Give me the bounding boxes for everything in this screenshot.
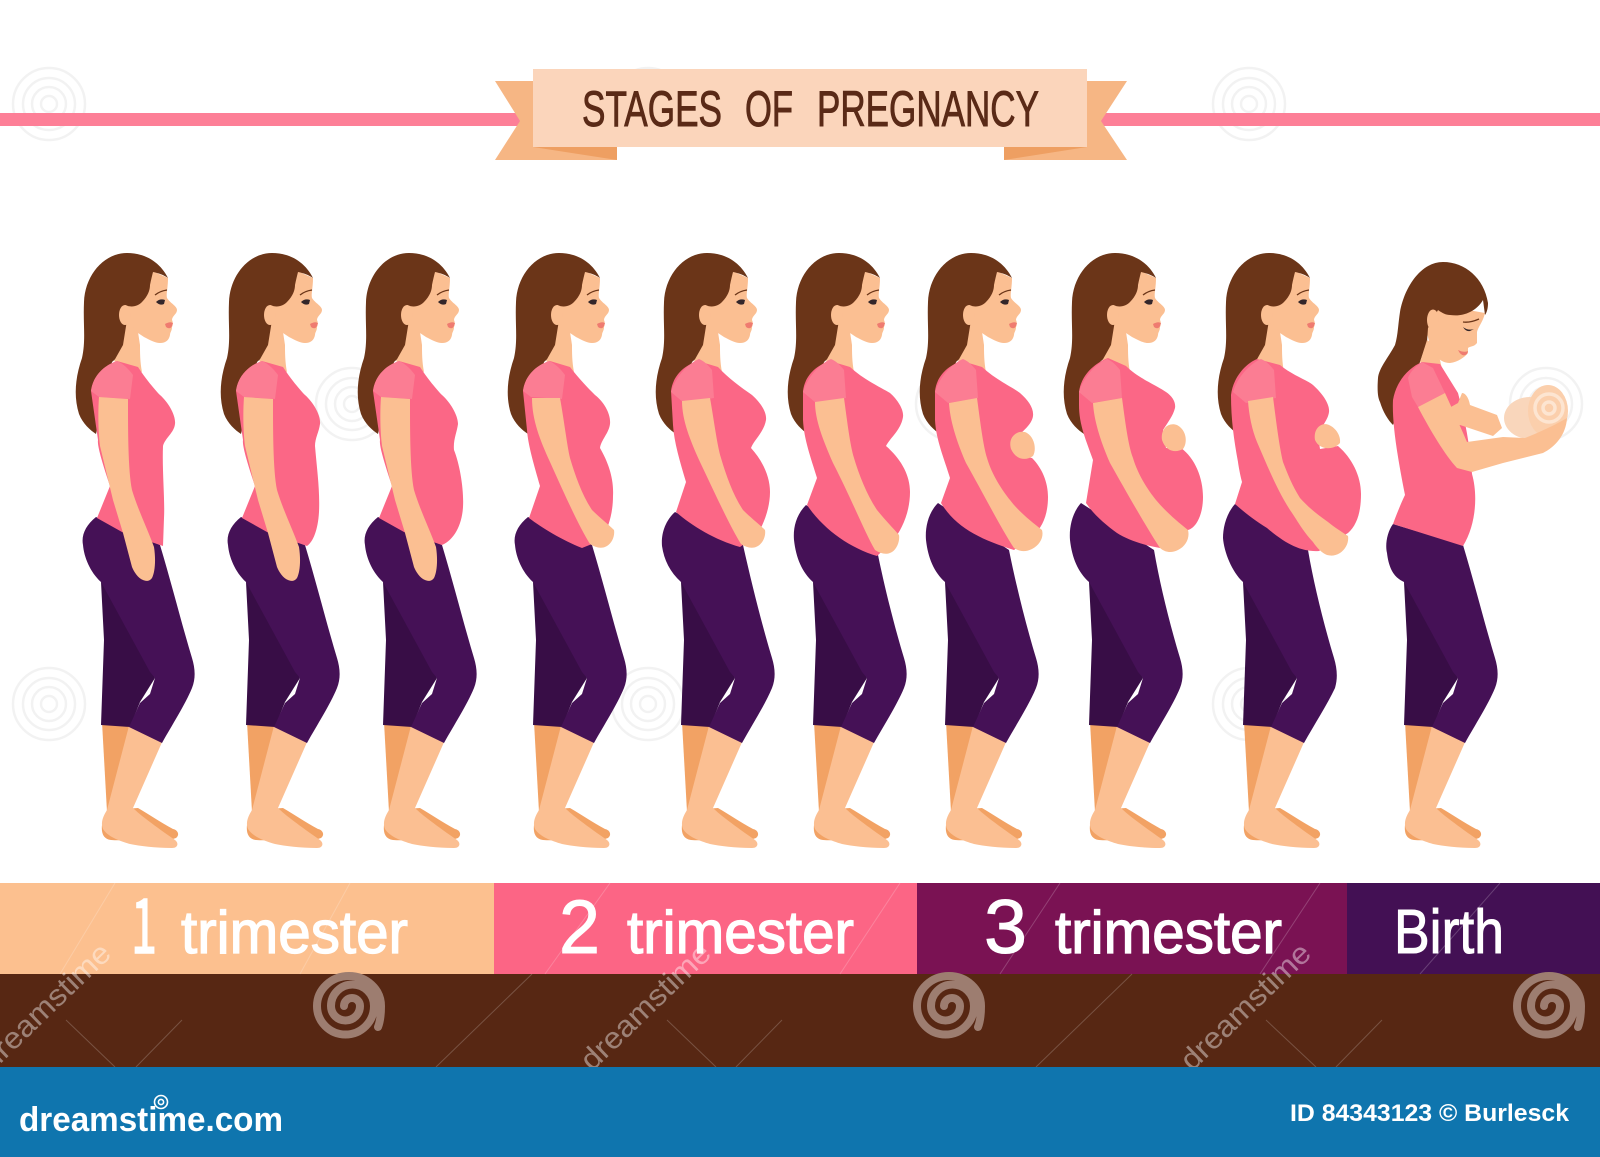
ribbon main panel <box>533 69 1087 147</box>
legs <box>533 582 610 848</box>
head and hair <box>76 253 177 434</box>
head and hair <box>788 253 889 434</box>
shirt <box>1393 362 1475 546</box>
head and hair <box>920 253 1021 434</box>
face <box>1425 305 1485 363</box>
title <box>582 81 1039 137</box>
legs <box>945 582 1022 848</box>
legs <box>101 582 178 848</box>
title: PREGNANCY <box>817 81 1039 137</box>
sleeve <box>1408 362 1445 407</box>
baby head <box>1528 385 1568 437</box>
far arm <box>1442 393 1502 436</box>
label: Birth <box>1394 898 1504 967</box>
shirt <box>1231 359 1361 551</box>
figure 2 <box>221 253 340 848</box>
shirt <box>1079 358 1203 548</box>
figure 9 <box>1218 253 1361 848</box>
pink rule left <box>0 113 525 126</box>
figure 6 <box>788 253 910 848</box>
sleeve <box>935 359 978 403</box>
arm on belly <box>532 398 614 548</box>
leggings <box>926 503 1039 743</box>
brown band spirals <box>317 976 1581 1034</box>
faint watermark rings <box>13 68 1582 740</box>
legs <box>383 582 460 848</box>
head and hair <box>358 253 459 434</box>
leggings <box>1386 524 1498 743</box>
segment background <box>1347 883 1600 974</box>
arm under belly <box>1248 397 1348 556</box>
trimester bar: 3 trimester <box>917 883 1347 974</box>
legs <box>246 582 323 848</box>
sleeve <box>1079 359 1122 403</box>
figure 3 <box>358 253 477 848</box>
shirt <box>803 361 910 556</box>
rotated watermark text: dreamstime <box>574 937 718 1077</box>
ribbon left tail <box>495 81 617 160</box>
sleeve <box>373 361 415 399</box>
numeral 3: 3 <box>984 885 1027 970</box>
title: STAGES <box>582 81 722 137</box>
figure 4: second trimester <box>508 253 627 848</box>
baby swirl <box>1535 394 1563 422</box>
arm on belly <box>682 398 765 548</box>
legs <box>1089 582 1166 848</box>
arm under belly <box>949 398 1043 551</box>
shirt <box>671 361 770 547</box>
ribbon left fold <box>533 147 617 160</box>
arm <box>380 397 437 581</box>
arm <box>243 397 300 581</box>
label: trimester <box>1055 899 1282 966</box>
leggings <box>662 512 775 743</box>
lips <box>1458 350 1468 355</box>
arm under belly <box>1093 398 1189 552</box>
footer image id: ID 84343123 © Burlesck <box>1290 1100 1570 1127</box>
head and hair <box>656 253 757 434</box>
leggings <box>365 517 477 743</box>
rotated watermark text <box>0 937 1318 1077</box>
segment background <box>0 883 494 974</box>
numeral 1: 1 <box>131 865 157 975</box>
figure 8 <box>1064 253 1203 848</box>
figure 7: third trimester <box>920 253 1048 848</box>
legs <box>1404 582 1481 848</box>
upper hand <box>1315 424 1340 448</box>
eye <box>1463 327 1474 331</box>
title ribbon <box>495 69 1127 160</box>
figure 1: first trimester early <box>76 253 195 848</box>
sleeve <box>523 361 565 399</box>
trimester bar: 2 trimester <box>494 883 917 974</box>
birth bar <box>1347 883 1600 974</box>
ear <box>1427 310 1439 330</box>
leggings <box>515 517 627 743</box>
sleeve <box>1233 359 1276 403</box>
near arm <box>1418 393 1567 472</box>
segment background <box>494 883 917 974</box>
hair <box>1378 262 1488 425</box>
footer spiral logo <box>154 1096 168 1108</box>
ribbon right tail <box>1004 81 1127 160</box>
shirt <box>523 361 613 548</box>
label: trimester <box>627 899 854 966</box>
brown band <box>0 974 1600 1067</box>
head and hair <box>221 253 322 434</box>
baby blanket <box>1504 397 1556 439</box>
leggings <box>1070 503 1183 743</box>
leggings <box>1223 504 1337 743</box>
sleeve <box>671 359 714 403</box>
segment background <box>917 883 1347 974</box>
leggings <box>83 517 195 743</box>
ribbon right fold <box>1004 147 1087 160</box>
blue footer <box>0 1067 1600 1157</box>
legs <box>1243 582 1320 848</box>
neck <box>1420 340 1444 378</box>
pink rule right <box>1098 113 1600 126</box>
shirt <box>373 361 463 545</box>
rotated watermark text: dreamstime <box>1174 937 1318 1077</box>
figure 10: birth, mother holding baby <box>1378 262 1568 848</box>
sleeve <box>236 361 278 399</box>
numeral 2: 2 <box>559 885 600 970</box>
eyebrow <box>1463 319 1479 322</box>
legs <box>813 582 890 848</box>
shirt <box>236 361 320 546</box>
leggings <box>228 517 340 743</box>
title: OF <box>745 81 793 137</box>
head and hair <box>1064 253 1165 434</box>
watermark lines <box>60 883 1500 1067</box>
upper hand <box>1010 432 1035 459</box>
arm on belly <box>815 398 899 554</box>
label: trimester <box>181 899 408 966</box>
head and hair <box>508 253 609 434</box>
leggings <box>794 505 907 743</box>
footer site name: dreamstime.com <box>19 1101 283 1139</box>
sleeve <box>803 359 846 403</box>
legs <box>681 582 758 848</box>
figure 5 <box>656 253 775 848</box>
shirt <box>91 361 175 546</box>
head and hair <box>1218 253 1319 434</box>
upper hand <box>1162 424 1186 451</box>
arm <box>98 397 155 581</box>
shirt <box>935 361 1048 550</box>
sleeve <box>91 361 133 399</box>
trimester bar: 1 trimester <box>0 865 494 975</box>
